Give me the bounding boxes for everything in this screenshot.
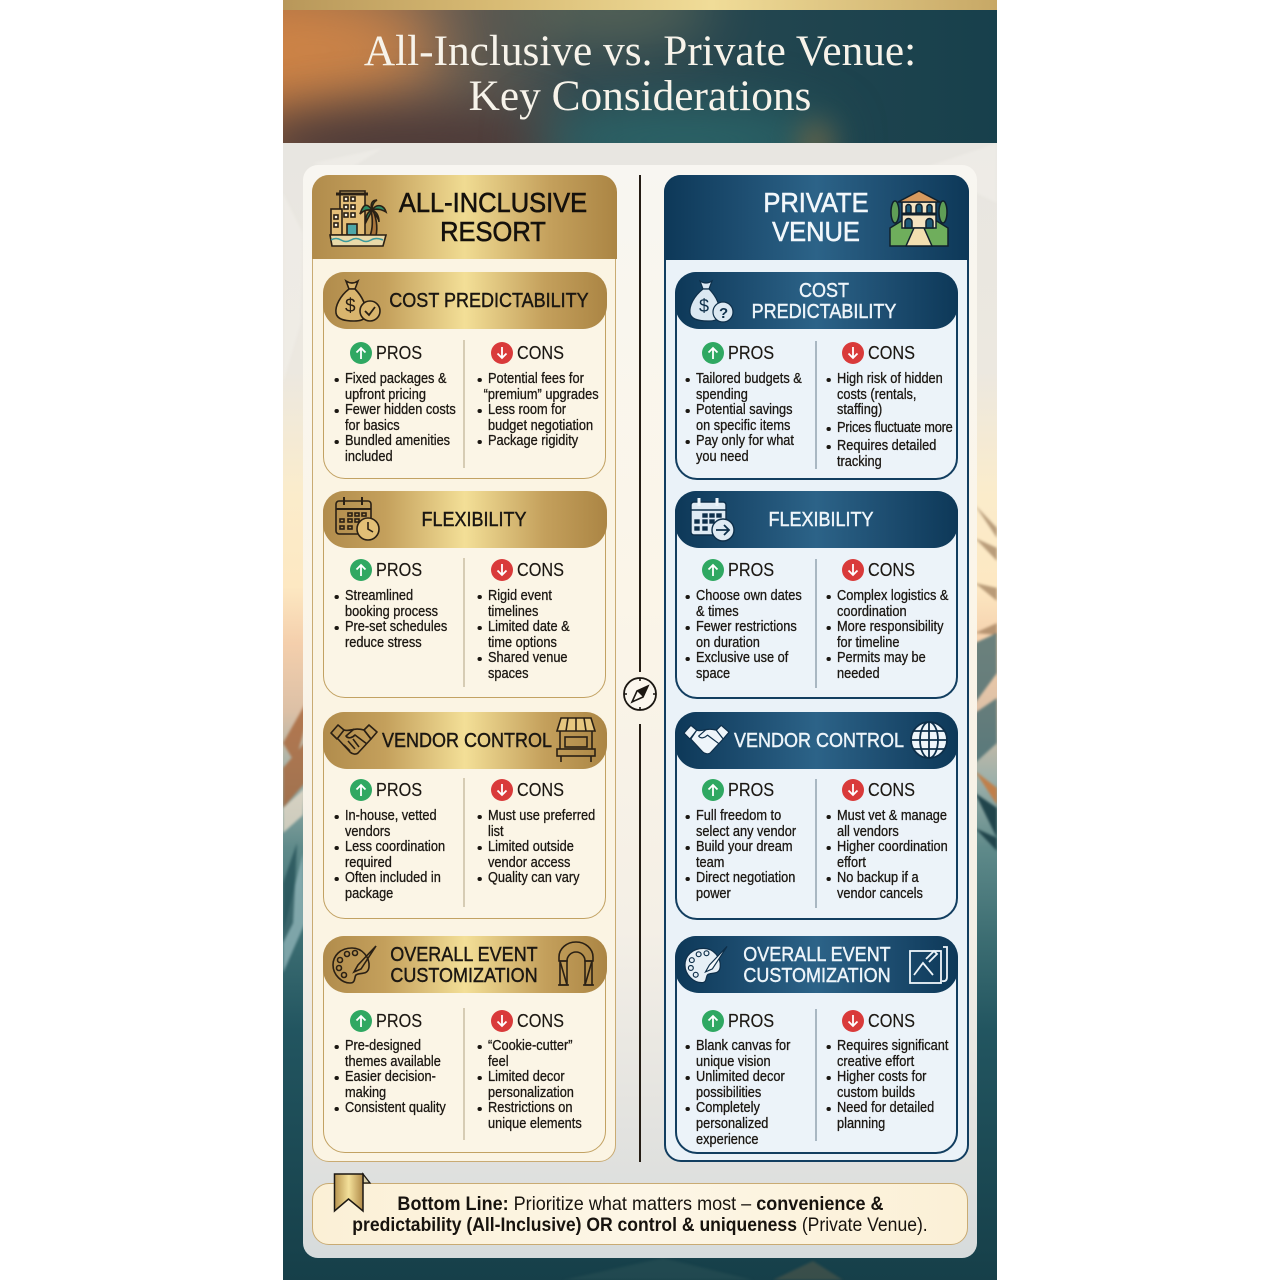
cons list: Permits may be [837, 650, 926, 666]
card header [322, 712, 606, 768]
cons label: CONS [517, 779, 564, 800]
heading: VENDOR CONTROL [734, 730, 904, 752]
cons list: planning [837, 1116, 885, 1132]
pros list: upfront pricing [345, 387, 426, 403]
pros list: Streamlined [345, 588, 413, 604]
cons list: budget negotiation [488, 418, 593, 434]
cons list: More responsibility [837, 619, 943, 635]
pros label [350, 1010, 422, 1032]
cons label [491, 342, 564, 364]
heading: COST [799, 280, 849, 302]
cons list: Need for detailed [837, 1100, 934, 1116]
card: flexibility (resort) [323, 491, 606, 698]
heading [752, 280, 896, 323]
heading [682, 945, 952, 987]
heading: private venue: PRIVATE [763, 187, 869, 218]
cons list: costs (rentals, [837, 387, 916, 403]
cons list: Limited decor [488, 1069, 565, 1085]
cons label: CONS [868, 342, 915, 363]
divider [815, 341, 817, 469]
pros list: vendors [345, 824, 390, 840]
icon: globe [910, 721, 948, 759]
pros list [334, 371, 456, 465]
cons label [842, 342, 915, 364]
cons list: Complex logistics & [837, 588, 948, 604]
center divider line top [639, 175, 641, 672]
cons list: coordination [837, 604, 907, 620]
divider [463, 558, 465, 687]
panel: all-inclusive resort column [312, 175, 616, 1162]
cons list: effort [837, 855, 866, 871]
heading: private venue: VENUE [772, 216, 860, 247]
card: flexibility (venue) [675, 491, 958, 699]
pros list: Less coordination [345, 839, 445, 855]
pros list: Fewer restrictions [696, 619, 797, 635]
cons label [491, 559, 564, 581]
card: overall event customization (venue) [675, 936, 958, 1154]
divider [815, 559, 817, 688]
heading: all-inclusive resort: ALL-INCLUSIVE [398, 187, 587, 218]
pros list: Pre-set schedules [345, 619, 447, 635]
cons list: Quality can vary [488, 870, 580, 886]
divider [815, 779, 817, 908]
cons list: Potential fees for [488, 371, 584, 387]
heading: FLEXIBILITY [421, 509, 526, 531]
icon: villa with garden [889, 190, 949, 247]
cons label: CONS [868, 559, 915, 580]
heading: all-inclusive resort [398, 187, 587, 247]
cons list [826, 371, 953, 470]
pros list: spending [696, 387, 748, 403]
pros label: PROS [376, 1010, 422, 1031]
pros list: Consistent quality [345, 1100, 446, 1116]
pros list: Easier decision- [345, 1069, 436, 1085]
pros list [696, 809, 796, 903]
icon: gold bookmark [333, 1172, 372, 1213]
icon: paint palette [684, 945, 728, 986]
cons list: Requires significant [837, 1038, 948, 1054]
bottom line text: Bottom Line: Prioritize what matters most – convenience & [397, 1193, 884, 1215]
pros list: included [345, 449, 393, 465]
cons list [478, 808, 595, 886]
card header [675, 936, 958, 993]
cons list: staffing) [837, 402, 882, 418]
cons list: timelines [488, 604, 538, 620]
cons list: Shared venue [488, 650, 568, 666]
main panel [303, 165, 977, 1258]
cons label [842, 559, 915, 581]
pros list: making [345, 1085, 386, 1101]
cons list: time options [488, 635, 557, 651]
pros list: package [345, 886, 393, 902]
cons list [837, 809, 948, 903]
divider [463, 340, 465, 468]
pros list: Blank canvas for [696, 1038, 790, 1054]
cons list: all vendors [837, 824, 899, 840]
pros list: Full freedom to [696, 808, 781, 824]
pros list [334, 808, 445, 902]
cons list: Requires detailed [837, 438, 936, 454]
heading: all-inclusive resort: RESORT [440, 216, 545, 247]
cons label [842, 1009, 922, 1033]
cons list: “premium” upgrades [484, 387, 599, 403]
pros list: space [696, 666, 730, 682]
pros list: Build your dream [696, 839, 793, 855]
card: cost predictability (resort) [323, 272, 606, 479]
pros list: possibilities [696, 1085, 761, 1101]
cons list: personalization [488, 1085, 574, 1101]
heading: VENDOR CONTROL [381, 730, 552, 752]
pros list: power [696, 886, 731, 902]
icon: blueprint [909, 945, 950, 985]
pros list: for basics [345, 418, 400, 434]
cons list: Limited date & [488, 619, 570, 635]
icon: resort with palm [329, 190, 388, 247]
icon: money bag with question mark: $ [699, 296, 709, 316]
cons list [478, 1038, 582, 1132]
center divider line bottom [639, 724, 641, 1162]
top gold band [283, 0, 997, 10]
column header: private venue [664, 175, 969, 260]
pros list: required [345, 855, 392, 871]
cons label [491, 1010, 564, 1032]
title: Key Considerations [469, 72, 811, 120]
cons list: Prices fluctuate more [837, 420, 953, 436]
pros list: Fewer hidden costs [345, 402, 456, 418]
pros list: on specific items [696, 418, 790, 434]
card: vendor control (resort) [323, 712, 606, 919]
icon: floral arch [558, 941, 594, 986]
pros list: experience [696, 1132, 758, 1148]
pros label: PROS [728, 342, 774, 363]
cons list: Rigid event [488, 588, 552, 604]
cons list: Package rigidity [488, 433, 578, 449]
pros label: PROS [376, 559, 422, 580]
pros list: Exclusive use of [696, 650, 788, 666]
card header [675, 491, 958, 548]
icon: calendar with clock [335, 497, 380, 541]
cons list: needed [837, 666, 880, 682]
pros list: unique vision [696, 1054, 771, 1070]
icon: calendar with arrow [690, 498, 735, 542]
pros list: & times [696, 604, 739, 620]
pros label [350, 779, 422, 801]
cons label: CONS [868, 779, 915, 800]
heading: CUSTOMIZATION [390, 965, 537, 987]
cons label [491, 779, 564, 801]
cons list: No backup if a [837, 870, 919, 886]
pros list: Unlimited decor [696, 1069, 785, 1085]
card header [322, 936, 606, 992]
cons list [837, 1039, 948, 1133]
heading [390, 944, 538, 987]
pros list [696, 1039, 790, 1148]
pros list: Pre-designed [345, 1038, 421, 1054]
title [364, 27, 916, 120]
cons list: Higher costs for [837, 1069, 926, 1085]
icon: market stall [556, 717, 596, 762]
cons list: tracking [837, 454, 882, 470]
pros label [702, 559, 774, 581]
pros list: Bundled amenities [345, 433, 450, 449]
pros label: PROS [728, 1010, 774, 1031]
panel: private venue column [664, 175, 969, 1162]
cons list: for timeline [837, 635, 899, 651]
pros list: Direct negotiation [696, 870, 795, 886]
icon: money bag with question mark: ? [719, 305, 728, 322]
card: overall event customization (resort) [323, 936, 606, 1153]
cons list: Must vet & manage [837, 808, 947, 824]
cons list: custom builds [837, 1085, 915, 1101]
pros list: Potential savings [696, 402, 793, 418]
divider [815, 1009, 817, 1141]
pros list: you need [696, 449, 749, 465]
heading: OVERALL EVENT [743, 944, 891, 966]
cons list [478, 588, 570, 682]
pros label [702, 342, 774, 364]
card header [322, 272, 606, 328]
header banner with title [283, 10, 997, 143]
pros list: Often included in [345, 870, 441, 886]
pros list: themes available [345, 1054, 441, 1070]
pros list: In-house, vetted [345, 808, 437, 824]
card header [675, 272, 958, 329]
pros list [686, 371, 802, 465]
pros list: personalized [696, 1116, 768, 1132]
cons list: feel [488, 1054, 509, 1070]
pros list: Completely [696, 1100, 760, 1116]
cons list: High risk of hidden [837, 371, 943, 387]
cons label [842, 778, 922, 802]
icon: paint palette [332, 946, 377, 984]
pros list: reduce stress [345, 635, 422, 651]
pros label: PROS [376, 342, 422, 363]
cons list [826, 588, 948, 682]
cons list: Less room for [488, 402, 566, 418]
cons list: unique elements [488, 1116, 582, 1132]
pros label [702, 778, 782, 802]
heading: private venue [763, 187, 869, 247]
cons list: vendor access [488, 855, 570, 871]
pros list: team [696, 855, 724, 871]
pros label: PROS [728, 559, 774, 580]
pros list: on duration [696, 635, 760, 651]
pros label [350, 559, 422, 581]
cons list: spaces [488, 666, 528, 682]
icon: money bag with question mark [689, 280, 734, 322]
pros label [702, 1009, 782, 1033]
heading: CUSTOMIZATION [743, 965, 891, 987]
pros list: Tailored budgets & [696, 371, 802, 387]
icon: money bag with check: $ [344, 296, 356, 316]
icon: handshake [683, 724, 730, 756]
heading: PREDICTABILITY [752, 301, 896, 323]
title: All-Inclusive vs. Private Venue: [364, 27, 916, 75]
bottom line text: predictability (All-Inclusive) OR control & uniqueness (Private Venue). [352, 1214, 928, 1236]
pros label: PROS [376, 779, 422, 800]
cons label: CONS [517, 1010, 564, 1031]
pros list [334, 588, 447, 651]
card: vendor control (venue) [675, 712, 958, 920]
pros list [686, 588, 802, 682]
pros list: booking process [345, 604, 438, 620]
heading: OVERALL EVENT [390, 944, 537, 966]
cons list: creative effort [837, 1054, 914, 1070]
icon: money bag with check [335, 279, 381, 322]
icon: handshake [330, 724, 378, 755]
pros label [350, 342, 422, 364]
pros list: select any vendor [696, 824, 796, 840]
cons list: Must use preferred [488, 808, 595, 824]
bottom line text [313, 1194, 965, 1236]
pros list: Fixed packages & [345, 371, 447, 387]
heading: FLEXIBILITY [768, 509, 874, 531]
heading: COST PREDICTABILITY [389, 290, 588, 312]
cons label: CONS [517, 559, 564, 580]
cons list: Limited outside [488, 839, 574, 855]
pros list: Choose own dates [696, 588, 802, 604]
divider [463, 1008, 465, 1140]
card: cost predictability (venue) [675, 272, 958, 480]
cons label: CONS [517, 342, 564, 363]
cons list: vendor cancels [837, 886, 923, 902]
card header [675, 712, 958, 769]
cons list [478, 371, 599, 449]
cons list: Higher coordination [837, 839, 948, 855]
pros list [334, 1038, 446, 1116]
icon: compass [623, 677, 657, 711]
pros list: Pay only for what [696, 433, 794, 449]
pros label: PROS [728, 779, 774, 800]
cons list: list [488, 824, 504, 840]
callout: bottom line [312, 1183, 968, 1245]
background: sunset scene with palm fronds [283, 143, 997, 1280]
cons list: Restrictions on [488, 1100, 572, 1116]
card header [322, 490, 606, 548]
column header: all-inclusive resort [312, 174, 616, 259]
cons list: “Cookie-cutter” [488, 1038, 572, 1054]
cons label: CONS [868, 1010, 915, 1031]
divider [463, 778, 465, 907]
